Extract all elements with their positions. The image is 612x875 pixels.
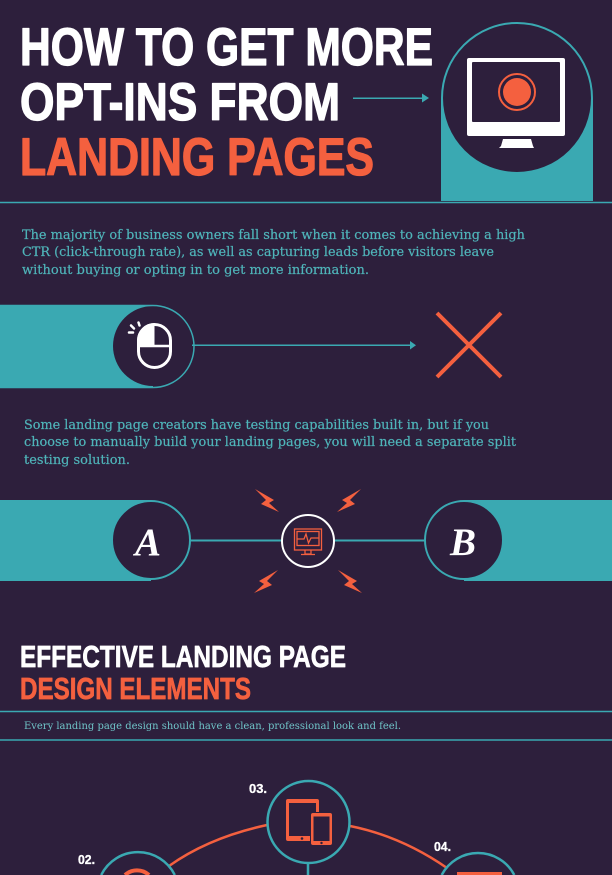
section subtitle: Every landing page design should have a clean, professional look and feel. <box>24 720 401 732</box>
badge: A: A <box>132 521 161 564</box>
icon: mouse <box>129 322 172 368</box>
split testing text: choose to manually build your landing pages, you will need a separate split <box>24 435 517 450</box>
title <box>20 18 433 187</box>
section heading <box>20 639 346 706</box>
badge: A <box>112 501 190 579</box>
intro text: The majority of business owners fall short when it comes to achieving a high <box>22 228 526 243</box>
section heading: EFFECTIVE LANDING PAGE <box>20 639 346 674</box>
arrow: title to monitor <box>353 94 429 102</box>
split testing text <box>24 418 517 468</box>
element 02: 02. <box>78 853 95 867</box>
title: LANDING PAGES <box>20 128 374 187</box>
element 03: 03. <box>249 782 267 796</box>
element 04 <box>434 840 514 875</box>
title: HOW TO GET MORE <box>20 18 433 77</box>
element 02 <box>78 852 175 875</box>
intro text: without buying or opting in to get more information. <box>22 263 369 278</box>
split testing text: Some landing page creators have testing capabilities built in, but if you <box>24 418 489 433</box>
element 04: 04. <box>434 840 451 854</box>
icon: cross <box>437 313 501 377</box>
split testing text: testing solution. <box>24 453 130 468</box>
band: A/B test <box>0 500 612 581</box>
badge: B: B <box>449 521 476 564</box>
icon: tablet and phone <box>286 799 333 846</box>
element 03 <box>249 781 350 863</box>
icon: monitor with pulse <box>282 515 334 567</box>
arrow: mouse to cross <box>192 341 416 350</box>
badge: B <box>425 501 503 579</box>
title: OPT-INS FROM <box>20 73 340 132</box>
icon: monitor in teal badge <box>441 23 593 201</box>
icons: lightning bolts <box>254 489 362 593</box>
connector arcs <box>169 825 447 868</box>
section heading: DESIGN ELEMENTS <box>20 671 251 706</box>
band: teal bar with mouse icon <box>0 305 194 388</box>
intro text: CTR (click-through rate), as well as capturing leads before visitors leave <box>22 245 494 260</box>
connector stem <box>307 863 309 875</box>
intro text <box>22 228 526 278</box>
